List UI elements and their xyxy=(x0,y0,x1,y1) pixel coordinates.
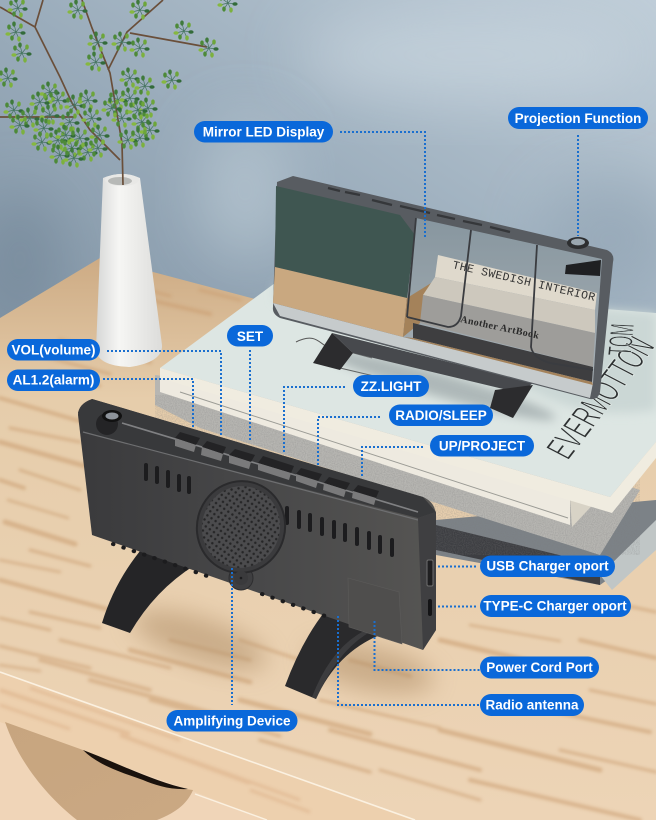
label: UP/PROJECT: UP/PROJECT xyxy=(439,438,526,454)
label: ZZ.LIGHT xyxy=(353,375,429,397)
mirror clock stand xyxy=(313,333,559,430)
label: AL1.2(alarm) xyxy=(7,370,100,391)
label: Mirror LED Display xyxy=(194,121,333,142)
clock body xyxy=(78,399,436,650)
label: Power Cord Port: Power Cord Port xyxy=(486,660,593,675)
plant xyxy=(0,0,238,185)
label: UP/PROJECT xyxy=(430,435,534,456)
mirror clock xyxy=(273,176,613,430)
mirror reflection with books xyxy=(403,218,602,385)
wall background xyxy=(0,0,656,420)
label: Power Cord Port xyxy=(480,656,599,678)
right stand leg xyxy=(285,610,385,699)
label: Radio antenna: Radio antenna xyxy=(485,698,579,712)
front clock xyxy=(78,399,436,650)
vase xyxy=(96,174,162,367)
label: AL1.2(alarm): AL1.2(alarm) xyxy=(13,372,94,388)
mirror surface left xyxy=(273,186,593,398)
left stand leg xyxy=(102,545,195,633)
mirror clock body xyxy=(273,176,613,399)
book cover title top line: TOM xyxy=(602,323,642,356)
label: Amplifying Device: Amplifying Device xyxy=(173,714,291,728)
power compartment outline xyxy=(348,578,402,644)
top buttons xyxy=(175,432,379,505)
label: ZZ.LIGHT: ZZ.LIGHT xyxy=(361,379,422,394)
label: Projection Function xyxy=(508,107,648,129)
label: RADIO/SLEEP xyxy=(389,404,493,426)
label: VOL(volume) xyxy=(7,339,100,360)
Type-C port xyxy=(428,599,432,616)
label: SET: SET xyxy=(237,329,264,344)
label: TYPE-C Charger oport: TYPE-C Charger oport xyxy=(483,598,627,614)
label: USB Charger oport: USB Charger oport xyxy=(486,558,609,574)
book stack xyxy=(155,283,656,590)
reflected book title: THE SWEDISH INTERIOR xyxy=(451,259,596,305)
label: USB Charger oport xyxy=(480,556,615,577)
label: Projection Function: Projection Function xyxy=(515,111,641,126)
side face xyxy=(418,512,436,650)
reflected book subtitle: Another ArtBook xyxy=(459,314,540,342)
label: Mirror LED Display: Mirror LED Display xyxy=(203,124,325,140)
label: RADIO/SLEEP: RADIO/SLEEP xyxy=(395,408,487,423)
projection lens top xyxy=(567,237,589,249)
bottom vent dots right xyxy=(262,594,328,617)
wooden table xyxy=(0,258,656,820)
speaker grille xyxy=(187,471,295,590)
connector lines xyxy=(103,132,578,705)
vents right xyxy=(285,506,394,557)
label: Amplifying Device xyxy=(166,710,298,732)
table front with finger pull xyxy=(0,722,267,820)
label: VOL(volume): VOL(volume) xyxy=(12,342,96,358)
top bevel xyxy=(78,399,436,518)
projection knob xyxy=(96,410,122,435)
label: SET xyxy=(227,325,273,346)
USB port xyxy=(427,560,433,586)
label: Radio antenna xyxy=(480,694,584,716)
bottom vent dots left xyxy=(113,544,216,579)
front clock shadows xyxy=(127,597,438,703)
vents upper left xyxy=(144,463,191,494)
label: TYPE-C Charger oport xyxy=(480,595,631,617)
